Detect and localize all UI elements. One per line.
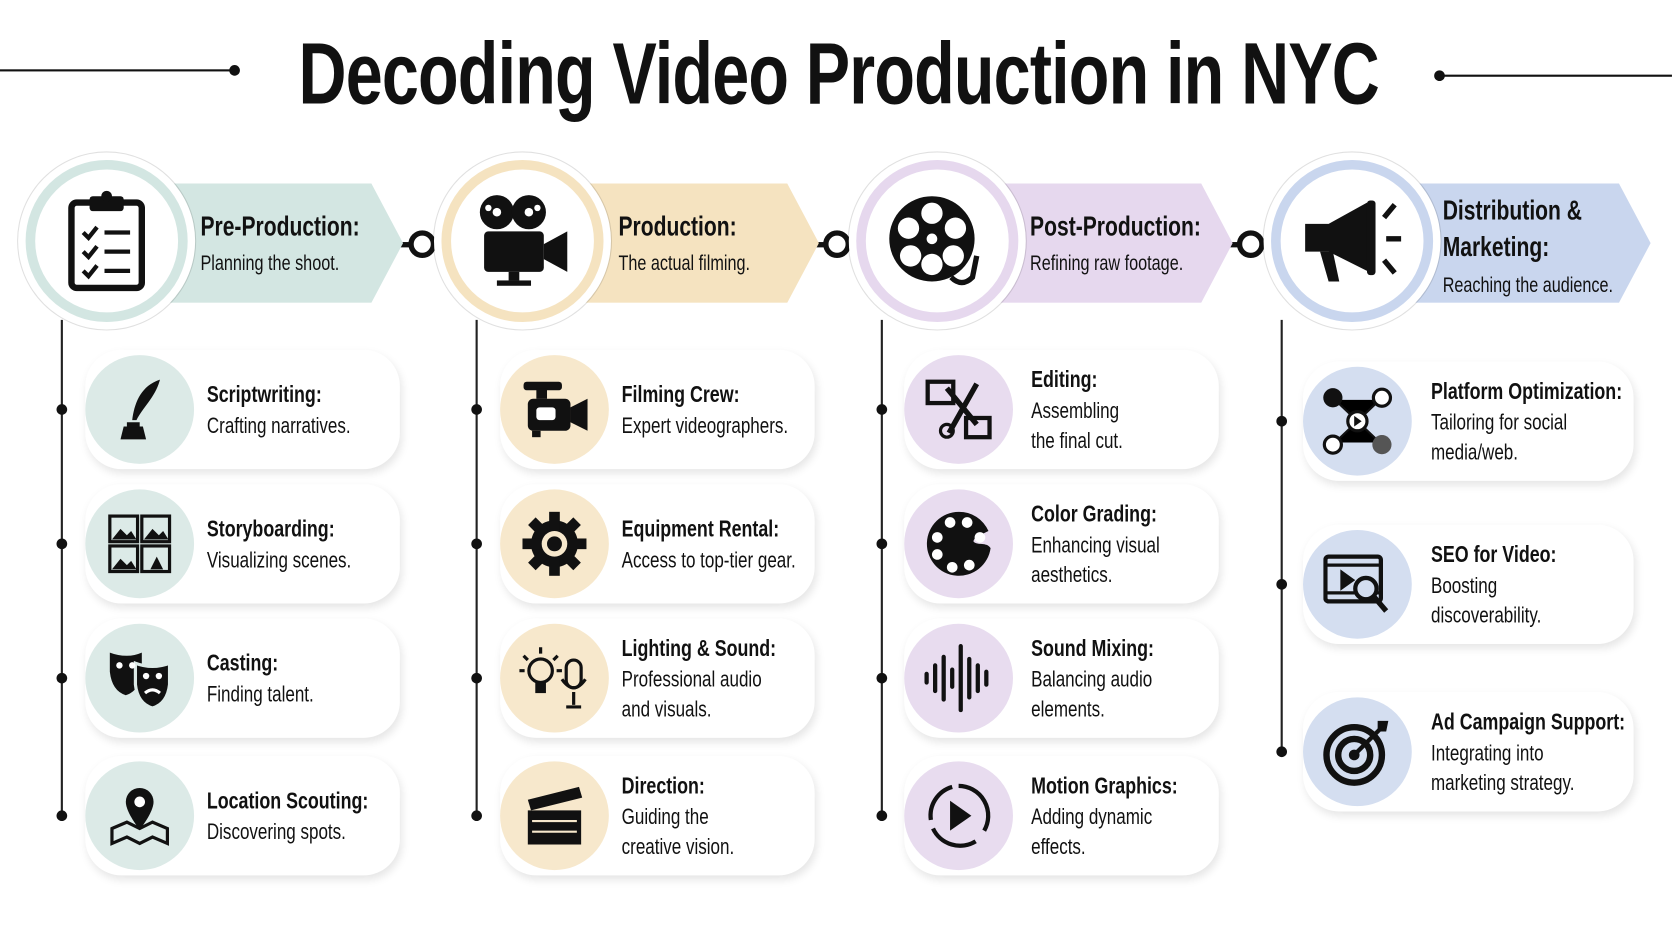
item: location scouting: Location Scouting:	[207, 787, 368, 814]
text: Reaching the audience.	[1443, 274, 1613, 297]
item: lighting & sound: Lighting & Sound:	[622, 634, 776, 661]
title left rule	[0, 69, 235, 71]
title right rule	[1440, 75, 1672, 77]
item: sound mixing	[904, 618, 1219, 738]
text: Pre-Production:	[200, 210, 360, 242]
item: platform optimization: Tailoring for social	[1431, 411, 1567, 435]
item: color grading: aesthetics.	[1031, 563, 1112, 588]
column: production items	[471, 355, 1400, 882]
item: ad campaign support	[1303, 692, 1634, 811]
text: The actual filming.	[618, 252, 750, 275]
text: Refining raw footage.	[1030, 252, 1183, 275]
item: platform optimization	[1303, 361, 1634, 481]
item: location scouting	[85, 756, 400, 875]
item: direction: Direction:	[622, 772, 705, 799]
item: lighting & sound: and visuals.	[622, 697, 712, 722]
item: color grading	[904, 484, 1219, 604]
item: color grading: Color Grading:	[1031, 500, 1157, 527]
connectors	[400, 230, 1264, 258]
item: casting	[85, 618, 400, 738]
item: sound mixing: elements.	[1031, 697, 1105, 722]
item: motion graphics: effects.	[1031, 835, 1086, 859]
panel header: pre-production	[17, 152, 403, 330]
item: filming crew	[500, 350, 815, 469]
item: editing: the final cut.	[1031, 429, 1123, 453]
item: direction: Guiding the	[622, 805, 709, 830]
item: lighting & sound: Professional audio	[622, 668, 762, 692]
item: storyboarding: Visualizing scenes.	[207, 548, 351, 573]
item: motion graphics: Motion Graphics:	[1031, 772, 1178, 799]
item: equipment rental: Equipment Rental:	[622, 515, 779, 542]
item: storyboarding	[85, 484, 400, 604]
text: Marketing:	[1443, 230, 1549, 262]
text: Distribution &	[1443, 194, 1582, 226]
item: motion graphics	[904, 756, 1219, 875]
item: scriptwriting	[85, 350, 400, 469]
item: equipment rental	[500, 484, 815, 604]
item: editing: Editing:	[1031, 366, 1097, 392]
item: ad campaign support: marketing strategy.	[1431, 771, 1574, 795]
item: editing	[904, 350, 1219, 469]
item: sound mixing: Sound Mixing:	[1031, 634, 1154, 661]
panel header: post-production	[848, 152, 1232, 330]
item: color grading: Enhancing visual	[1031, 533, 1160, 558]
item: SEO for video: discoverability.	[1431, 604, 1541, 628]
text: Planning the shoot.	[200, 252, 339, 275]
item: filming crew: Expert videographers.	[622, 414, 788, 438]
text: Post-Production:	[1030, 210, 1201, 242]
column: pre-production items	[56, 355, 1400, 882]
item: casting: Finding talent.	[207, 682, 314, 707]
item: editing: Assembling	[1031, 399, 1119, 423]
item: platform optimization: media/web.	[1431, 440, 1518, 465]
column: distribution items	[1276, 366, 1638, 818]
item: ad campaign support: Ad Campaign Support:	[1431, 708, 1625, 735]
item: casting: Casting:	[207, 649, 278, 676]
item: ad campaign support: Integrating into	[1431, 741, 1544, 766]
title: Decoding Video Production in NYC	[299, 26, 1379, 123]
item: storyboarding: Storyboarding:	[207, 515, 335, 542]
text: Production:	[618, 210, 737, 242]
item: filming crew: Filming Crew:	[622, 381, 740, 407]
item: sound mixing: Balancing audio	[1031, 668, 1152, 692]
item: motion graphics: Adding dynamic	[1031, 805, 1152, 830]
item: direction	[500, 756, 815, 875]
item: direction: creative vision.	[622, 835, 734, 859]
column: post-production items	[876, 355, 1400, 882]
item: SEO for video: Boosting	[1431, 574, 1497, 598]
panel header: production	[433, 152, 819, 330]
item: scriptwriting: Scriptwriting:	[207, 381, 322, 407]
item: equipment rental: Access to top-tier gear.	[622, 548, 796, 573]
item: scriptwriting: Crafting narratives.	[207, 414, 351, 438]
item: SEO for video: SEO for Video:	[1431, 541, 1556, 567]
item: SEO for video	[1303, 525, 1634, 644]
item: location scouting: Discovering spots.	[207, 820, 346, 845]
item: platform optimization: Platform Optimization:	[1431, 377, 1622, 404]
item: lighting & sound	[500, 618, 815, 738]
panel header: distribution & marketing	[1262, 152, 1650, 330]
vertical timeline lines	[32, 152, 1440, 860]
